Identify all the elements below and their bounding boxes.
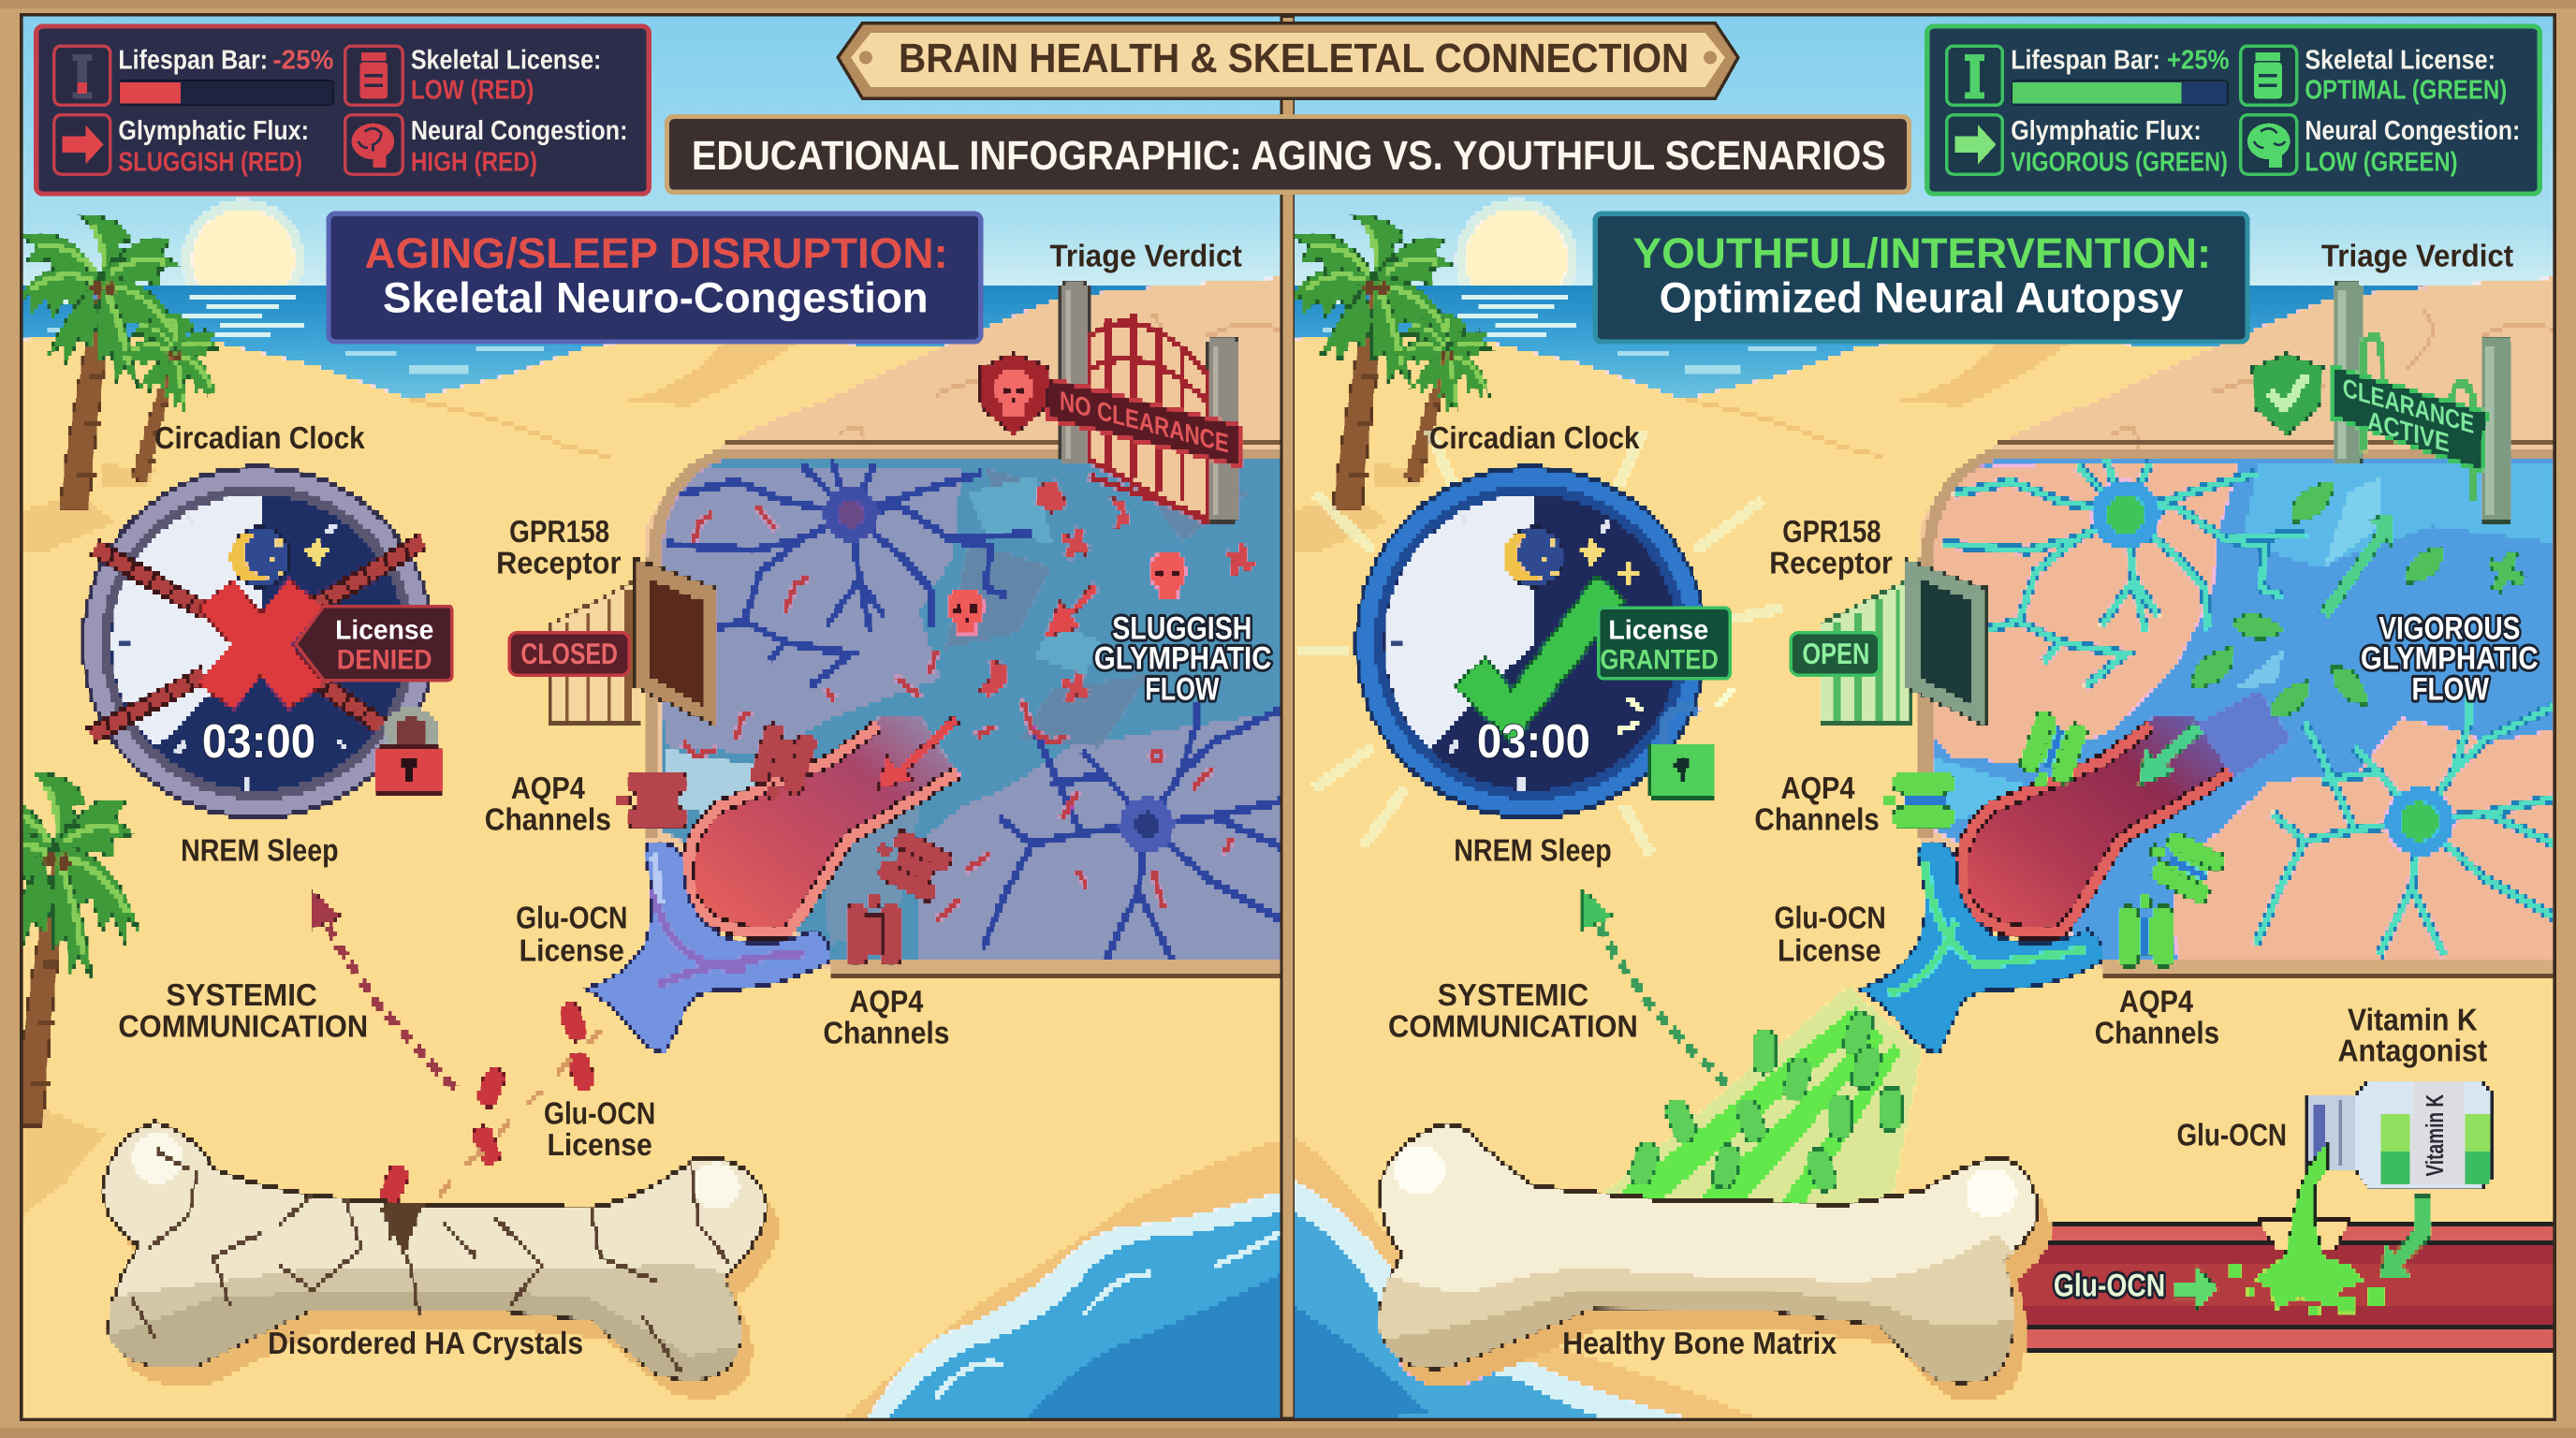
circadian clock granted <box>1354 465 1734 820</box>
label: systemic communication: COMMUNICATION <box>118 1010 368 1045</box>
tag: license denied: License <box>335 616 433 646</box>
stat: skeletal license: LOW (RED) <box>411 76 534 105</box>
panel: aging scene <box>0 0 1323 1438</box>
astrocyte endfoot <box>1858 842 2103 1053</box>
icon: locked padlock <box>374 712 444 794</box>
icon: pouring slime <box>2228 1143 2384 1316</box>
debris leaves <box>2192 481 2526 718</box>
label: Glu-OCN license: Glu-OCN <box>1774 902 1886 936</box>
label: healthy bone matrix: Healthy Bone Matrix <box>1562 1328 1837 1362</box>
icon: healthy brain <box>2241 115 2297 174</box>
stat: glymphatic flux: VIGOROUS (GREEN) <box>2011 148 2228 178</box>
ocean corner <box>1281 1130 1764 1430</box>
icon: congested brain <box>345 115 402 174</box>
heading green line: YOUTHFUL/INTERVENTION: <box>1633 228 2211 278</box>
icon: sluggish arrow <box>54 115 110 174</box>
stat: glymphatic flux: Glymphatic Flux: <box>118 117 309 146</box>
stat: lifespan: +25% <box>2167 46 2230 76</box>
stat: skeletal license: OPTIMAL (GREEN) <box>2305 76 2507 105</box>
icon: check shield <box>2252 353 2323 435</box>
icon: vigorous arrow <box>1947 115 2002 174</box>
GPR158 door closed <box>550 559 716 726</box>
heading white line: Optimized Neural Autopsy <box>1660 272 2184 322</box>
label: AQP4 channels lower: AQP4 <box>2119 986 2194 1020</box>
brain tissue <box>1927 457 2559 966</box>
stat: skeletal license: Skeletal License: <box>411 46 601 76</box>
label: systemic communication: SYSTEMIC <box>166 979 317 1014</box>
label: vigorous flow: GLYMPHATIC <box>2361 640 2539 677</box>
label: GPR158 receptor: Receptor <box>496 547 622 581</box>
heading white line: Skeletal Neuro-Congestion <box>383 272 929 322</box>
blood vessel <box>1961 714 2231 933</box>
icon: flow arrow <box>1045 583 1099 638</box>
label: sluggish flow: SLUGGISH <box>1112 611 1251 647</box>
time: 03:00 <box>202 716 315 769</box>
icon: red x <box>198 580 324 708</box>
arrow: systemic communication <box>1582 888 1728 1084</box>
label: Glu-OCN license upper <box>516 902 627 969</box>
label: Glu-OCN license <box>1774 902 1886 969</box>
stat: lifespan <box>2011 46 2230 105</box>
label: AQP4 channels upper <box>1754 772 1880 838</box>
label: sluggish flow: FLOW <box>1145 672 1220 708</box>
label: vitamin K antagonist: Vitamin K <box>2348 1004 2478 1038</box>
label: AQP4 channels lower <box>2095 986 2219 1051</box>
stat: skeletal license <box>2305 46 2507 105</box>
tag: license granted: GRANTED <box>1600 644 1719 675</box>
icon: lifespan bar <box>54 46 110 105</box>
label: AQP4 channels upper: AQP4 <box>1781 772 1855 807</box>
stat: glymphatic flux <box>2011 117 2228 178</box>
time: 03:00 <box>1477 716 1590 769</box>
icon: green check <box>1454 575 1625 742</box>
label: vitamin K antagonist <box>2337 1004 2488 1070</box>
blood vessel horizontal <box>2008 1219 2566 1352</box>
scene art: aging <box>0 0 1323 1438</box>
neuron 2 <box>2256 698 2559 956</box>
debris <box>979 479 1255 705</box>
label: GPR158 receptor <box>496 516 622 581</box>
label: triage verdict: Triage Verdict <box>1050 240 1243 274</box>
triage gate: no clearance <box>979 283 1240 522</box>
icon: skeletal license <box>2241 46 2297 105</box>
label: vigorous flow <box>2361 611 2539 708</box>
label: sluggish flow: GLYMPHATIC <box>1094 640 1271 677</box>
label: systemic communication <box>1388 979 1638 1045</box>
label: vigorous flow: VIGOROUS <box>2378 611 2520 647</box>
label: triage verdict: Triage Verdict <box>2321 240 2514 274</box>
stat: neural congestion: Neural Congestion: <box>2305 117 2520 146</box>
chains <box>91 540 424 736</box>
label: Glu-OCN vessel: Glu-OCN <box>2054 1269 2165 1304</box>
circadian clock denied <box>80 465 444 820</box>
label: vitamin K antagonist: Antagonist <box>2337 1035 2488 1070</box>
triage gate: clearance active <box>2252 283 2511 522</box>
icon: moon <box>230 527 290 587</box>
brain tissue <box>654 457 1286 969</box>
palm shadows <box>1295 463 1429 550</box>
icon: beach palm trees <box>0 213 228 1126</box>
GPR158 door open <box>1821 559 1986 726</box>
tag: closed <box>509 633 629 675</box>
astrocyte endfoot <box>585 842 829 1053</box>
stat: neural congestion: LOW (GREEN) <box>2305 148 2458 178</box>
label: Glu-OCN license: License <box>1778 935 1881 969</box>
rays around clock <box>1298 431 1782 855</box>
icon: vitamin K bottle <box>2306 1081 2492 1188</box>
stat: lifespan: Lifespan Bar: <box>118 46 268 76</box>
ocean corner <box>846 1142 1281 1418</box>
label: GPR158 receptor: GPR158 <box>509 516 609 550</box>
label: vigorous flow: FLOW <box>2411 672 2490 708</box>
HUD: aging stats <box>37 26 649 194</box>
icon: skull shield <box>979 353 1050 435</box>
icon: healthy bone <box>1364 1123 2052 1401</box>
bottle label: Vitamin K <box>2422 1094 2450 1177</box>
stat: lifespan: Lifespan Bar: <box>2011 46 2160 76</box>
neuron 1 <box>667 460 1032 687</box>
stat: skeletal license: Skeletal License: <box>2305 46 2496 76</box>
label: Glu-OCN license upper: Glu-OCN <box>516 902 627 936</box>
blood vessel <box>688 714 959 933</box>
scattered Glu-OCN pills <box>377 1000 597 1207</box>
icon: cracked bone <box>98 1123 781 1399</box>
stat: neural congestion <box>411 117 627 178</box>
labels: aging scene <box>118 240 1271 1362</box>
stat: neural congestion: Neural Congestion: <box>411 117 627 146</box>
subtitle text: EDUCATIONAL INFOGRAPHIC: AGING VS. YOUTHFUL SCENARIOS <box>692 133 1886 179</box>
label: disordered crystals: Disordered HA Crystals <box>268 1328 583 1362</box>
neuron 2 <box>983 701 1286 960</box>
panel divider <box>1281 17 1295 1418</box>
label: systemic communication: COMMUNICATION <box>1388 1010 1638 1045</box>
label: circadian clock: Circadian Clock <box>1429 422 1640 457</box>
stat: skeletal license <box>411 46 601 105</box>
tag: license granted: License <box>1608 616 1708 646</box>
label: NREM sleep: NREM Sleep <box>1454 835 1612 869</box>
label: Glu-OCN license lower: License <box>547 1129 652 1164</box>
label: AQP4 channels upper <box>485 772 611 838</box>
stat: glymphatic flux: SLUGGISH (RED) <box>118 148 302 178</box>
label: AQP4 channels upper: Channels <box>485 803 611 838</box>
tag: license granted <box>1599 608 1730 679</box>
heading red line: AGING/SLEEP DISRUPTION: <box>365 228 948 278</box>
sign: no clearance: NO CLEARANCE <box>1060 388 1229 460</box>
label: sluggish flow <box>1094 611 1271 708</box>
scene art: youthful <box>1273 0 2576 1438</box>
icon: beach palm trees <box>1286 213 1501 509</box>
label: circadian clock: Circadian Clock <box>154 422 365 457</box>
stat: neural congestion: HIGH (RED) <box>411 148 537 178</box>
label: AQP4 channels upper: Channels <box>1754 803 1880 838</box>
stat: glymphatic flux <box>118 117 309 178</box>
subtitle banner <box>667 117 1909 192</box>
title banner <box>838 23 1738 98</box>
label: GPR158 receptor: Receptor <box>1769 547 1894 581</box>
stat: lifespan: -25% <box>272 46 334 76</box>
label: AQP4 channels upper: AQP4 <box>511 772 585 807</box>
neuron 1 <box>1942 460 2306 687</box>
icon: skeletal license <box>345 46 402 105</box>
AQP4 channel icons <box>616 722 955 965</box>
icon: green pills <box>1626 1009 1903 1195</box>
label: AQP4 channels lower: Channels <box>2095 1017 2219 1051</box>
label: GPR158 receptor: GPR158 <box>1782 516 1881 550</box>
labels: youthful scene <box>1388 240 2539 1362</box>
arrow: antagonist effect <box>2380 1196 2431 1278</box>
label: systemic communication: SYSTEMIC <box>1438 979 1589 1014</box>
heading: aging <box>329 213 981 342</box>
tag: license denied: DENIED <box>337 644 432 675</box>
faint signal <box>437 1022 607 1196</box>
arrow: systemic communication <box>311 888 455 1088</box>
label: Glu-OCN license lower <box>544 1097 655 1164</box>
stat: neural congestion <box>2305 117 2520 178</box>
icon: flow arrow <box>2320 514 2393 618</box>
label: Glu-OCN license lower: Glu-OCN <box>544 1097 655 1132</box>
AQP4 channel icons <box>1882 710 2228 967</box>
label: GPR158 receptor <box>1769 516 1894 581</box>
stat: lifespan <box>118 46 334 105</box>
sign: clearance active: ACTIVE <box>2367 407 2450 459</box>
sign: clearance active: CLEARANCE <box>2343 374 2475 440</box>
label: AQP4 channels lower: Channels <box>823 1017 949 1051</box>
tag: open: OPEN <box>1802 638 1869 670</box>
label: Glu-OCN license upper: License <box>520 935 624 969</box>
icon: skulls <box>948 552 1186 634</box>
label: AQP4 channels lower: AQP4 <box>849 986 924 1020</box>
tag: open <box>1791 633 1880 675</box>
icon: moon <box>1503 527 1564 587</box>
title text: BRAIN HEALTH & SKELETAL CONNECTION <box>899 37 1689 82</box>
icon: label arrow <box>2175 1267 2217 1310</box>
stat: glymphatic flux: Glymphatic Flux: <box>2011 117 2202 146</box>
label: NREM sleep: NREM Sleep <box>181 835 339 869</box>
label: systemic communication <box>118 979 368 1045</box>
glu-ocn beam <box>1577 986 1922 1216</box>
palm shadows <box>23 463 156 1216</box>
icon: open padlock <box>1618 690 1734 799</box>
panel: youthful scene <box>1273 0 2576 1438</box>
tag: closed: CLOSED <box>520 638 618 670</box>
label: AQP4 channels lower <box>823 986 949 1051</box>
icon: lifespan bar <box>1947 46 2002 105</box>
tag: license denied <box>296 607 452 681</box>
heading: youthful <box>1595 213 2247 342</box>
label: Glu-OCN bottle: Glu-OCN <box>2176 1119 2287 1153</box>
HUD: youthful stats <box>1927 26 2539 194</box>
